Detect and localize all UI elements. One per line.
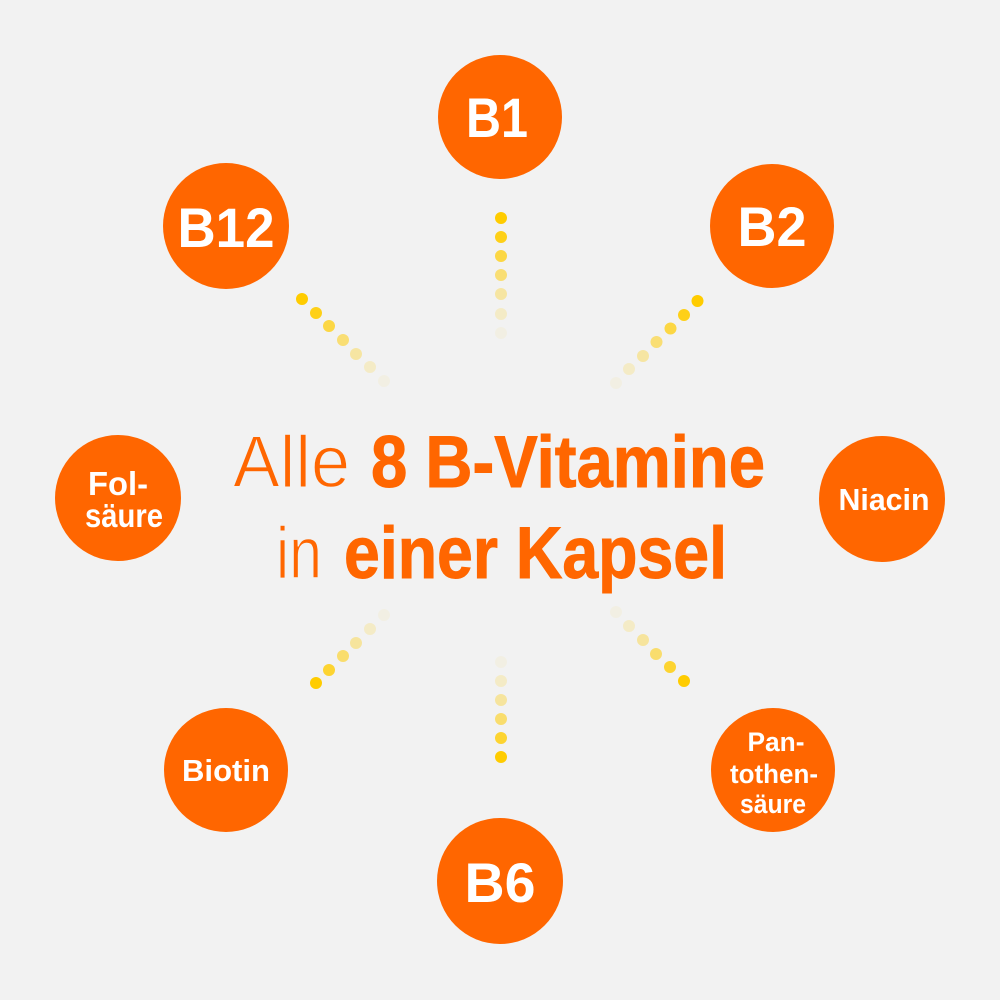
circle: Pantothensäure: tothen-	[730, 759, 818, 789]
title: 8 B-Vitamine	[371, 422, 765, 503]
circle: B2: B2	[738, 195, 806, 258]
circle: Pantothensäure: Pan-	[748, 727, 804, 757]
circle: B1	[438, 55, 562, 179]
circle: B12	[163, 163, 289, 289]
circle: Biotin	[164, 708, 288, 832]
title: Alle	[233, 422, 350, 503]
dotted ray: top	[495, 212, 507, 339]
circle: Niacin	[819, 436, 945, 562]
dotted ray: bottom left	[310, 609, 390, 689]
dotted ray: bottom	[495, 656, 507, 763]
circle: Pantothensäure	[711, 708, 835, 832]
circle: B6: B6	[464, 851, 536, 914]
circle: B12: B12	[178, 196, 274, 259]
circle: Pantothensäure: säure	[740, 789, 806, 819]
circle: B1: B1	[466, 86, 528, 149]
circle: Folsäure	[55, 435, 181, 561]
dotted ray: bottom right	[610, 606, 690, 687]
circle: Biotin: Biotin	[182, 753, 270, 788]
dotted ray: top left	[296, 293, 390, 387]
circle: Folsäure: Fol-	[88, 465, 148, 502]
title: einer Kapsel	[344, 513, 727, 594]
circle: B2	[710, 164, 834, 288]
circle: Folsäure: säure	[85, 497, 163, 534]
circle: B6	[437, 818, 563, 944]
circle: Niacin: Niacin	[838, 482, 930, 517]
title	[233, 422, 765, 594]
dotted ray: top right	[610, 295, 704, 389]
title: in	[276, 513, 322, 594]
